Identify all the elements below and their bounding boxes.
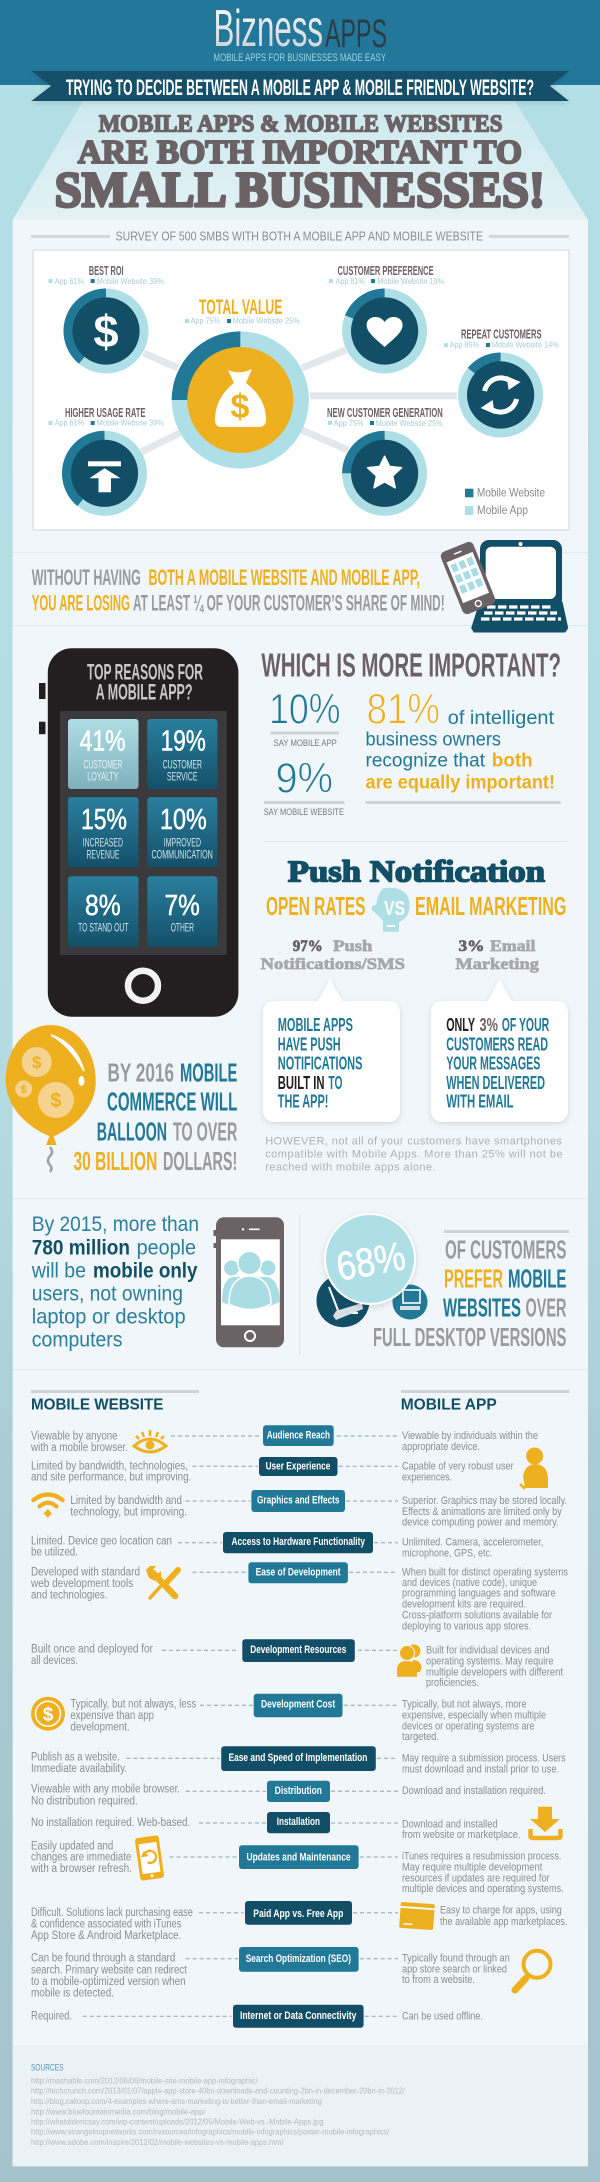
row: user experience xyxy=(31,1448,548,1488)
row: user experience: experiences. xyxy=(402,1472,452,1484)
chart: total value: App 75% xyxy=(191,317,220,326)
tile: 19% customer service: SERVICE xyxy=(167,769,198,783)
row: distribution: Download and installation required. xyxy=(402,1785,546,1797)
text: 780 million mobile only: laptop or desktop xyxy=(32,1305,186,1328)
callout: balloon to 30 billion: COMMERCE WILL xyxy=(107,1087,237,1117)
icon: magnifier xyxy=(515,1951,550,1990)
chart: customer preference: Mobile Website 19% xyxy=(377,277,444,286)
row: development resources: Development Resources xyxy=(250,1644,346,1656)
stat: 10% say mobile app xyxy=(269,685,341,748)
row: graphics and effects: technology, but improving. xyxy=(70,1506,187,1518)
survey heading: SURVEY OF 500 SMBS WITH BOTH A MOBILE APP AND MOBILE WEBSITE xyxy=(116,230,483,244)
icon: wifi xyxy=(34,1494,62,1518)
row: updates and maintenance: resources if updates are required for xyxy=(402,1872,550,1884)
tile: 8% to stand out xyxy=(68,876,138,947)
icon: phone with people xyxy=(214,1217,284,1347)
row: development cost: expensive, especially when multiple xyxy=(402,1710,546,1722)
callout: balloon to 30 billion: BY 2016 xyxy=(108,1058,174,1088)
sources panel background xyxy=(13,2045,588,2166)
icon: balloon xyxy=(6,1025,96,1172)
row: distribution: Distribution xyxy=(275,1785,322,1797)
label: 3% email marketing: Marketing xyxy=(455,956,539,973)
row: development resources: proficiencies. xyxy=(426,1677,479,1689)
tile: 10% improved communication: 10% xyxy=(160,804,207,836)
row: internet or data connectivity: Required. xyxy=(31,2010,72,2022)
tile: 10% improved communication xyxy=(147,797,217,867)
big phone: top reasons: A MOBILE APP? xyxy=(96,679,192,704)
speech bubble: mobile apps: TO xyxy=(328,1073,342,1093)
header band xyxy=(0,0,600,85)
row: updates and maintenance: Easily updated and xyxy=(31,1840,113,1852)
row: ease of development: deploying to various app stores. xyxy=(402,1620,531,1632)
speech bubble: only 3%: WITH EMAIL xyxy=(446,1092,514,1112)
row: updates and maintenance xyxy=(30,1835,564,1895)
label: 3% email marketing: 3% xyxy=(458,938,484,955)
tile: 41% customer loyalty: LOYALTY xyxy=(87,769,119,783)
row: development cost: development. xyxy=(70,1722,130,1734)
row: updates and maintenance: iTunes requires a resubmission process. xyxy=(402,1851,561,1863)
row: development cost: expensive than app xyxy=(70,1710,154,1722)
callout: 68% prefer mobile websites: WEBSITES xyxy=(443,1293,521,1323)
tile: 10% improved communication: COMMUNICATION xyxy=(152,848,213,862)
icon: developers xyxy=(397,1644,422,1677)
text: 780 million mobile only: By 2015, more than xyxy=(32,1213,199,1236)
row: development cost: Typically, but not always, less xyxy=(70,1698,197,1710)
callout: 68% prefer mobile websites: OVER xyxy=(526,1293,567,1323)
chart: best roi: Mobile Website 39% xyxy=(97,277,164,286)
row: paid app vs free app: & confidence associated with iTunes xyxy=(31,1918,182,1930)
row: search optimization: to a mobile-optimized version when xyxy=(31,1976,186,1988)
row: access to hardware functionality: Limited. Device geo location can xyxy=(31,1535,172,1547)
tile: 41% customer loyalty: 41% xyxy=(80,726,126,758)
stat: 81% both equally important: of intelligent xyxy=(448,708,555,729)
row: user experience: Limited by bandwidth, technologies, xyxy=(31,1460,188,1472)
icon: person xyxy=(520,1448,548,1488)
row: paid app vs free app: Easy to charge for apps, using xyxy=(440,1904,562,1916)
row: installation: Download and installed xyxy=(402,1818,498,1830)
stat: 10% say mobile app: 10% xyxy=(269,685,341,733)
stat: 10% say mobile app: SAY MOBILE APP xyxy=(274,738,337,748)
stat: 81% both equally important: recognize that xyxy=(366,751,486,772)
chart: best roi: App 61% xyxy=(55,277,84,286)
tile: 41% customer loyalty xyxy=(68,719,138,789)
row: development cost xyxy=(31,1694,546,1743)
tile: 7% other xyxy=(147,876,217,947)
sources: http://www.strangeloopnetworks.com/resources/infographics/mobile-infographics/poster-mobile-infographics/ xyxy=(31,2128,390,2137)
icon: 68% circle with computers: 68% xyxy=(333,1234,409,1290)
speech bubble: mobile apps: NOTIFICATIONS xyxy=(278,1054,362,1074)
sources xyxy=(31,2062,406,2147)
big phone: top reasons: TOP REASONS FOR xyxy=(87,659,203,684)
label: 97% push notifications: Push xyxy=(333,938,373,955)
row: ease and speed of implementation: May require a submission process. Users xyxy=(402,1753,566,1765)
row: access to hardware functionality xyxy=(31,1532,543,1560)
chart: customer preference: App 81% xyxy=(336,277,365,286)
stat: 81% both equally important xyxy=(366,685,561,804)
row: paid app vs free app: Difficult. Solutions lack purchasing ease xyxy=(31,1907,193,1919)
text: 780 million mobile only: will be xyxy=(31,1259,86,1282)
icon: money bag: $ xyxy=(231,388,250,426)
icon: laptop xyxy=(472,540,568,632)
row: access to hardware functionality: microphone, GPS, etc. xyxy=(402,1548,492,1560)
row: search optimization xyxy=(31,1947,550,2000)
row: audience reach: appropriate device. xyxy=(402,1441,480,1453)
row: ease of development: and technologies. xyxy=(31,1589,108,1601)
stat: 81% both equally important: 81% xyxy=(367,685,440,733)
callout: share of mind xyxy=(32,565,445,616)
row: audience reach: with a mobile browser. xyxy=(30,1442,128,1454)
row: development resources xyxy=(31,1639,563,1689)
stat: 81% both equally important: both xyxy=(492,751,533,772)
sources: http://techcrunch.com/2013/01/07/apple-app-store-40bn-downloads-and-counting-2bn-in-december-20bn-in-2012/ xyxy=(31,2087,406,2096)
row: ease and speed of implementation: Publish as a website. xyxy=(31,1751,120,1763)
heading: mobile app xyxy=(401,1390,570,1413)
icon: balloon: $ xyxy=(21,1084,27,1096)
stat: 81% both equally important: are equally important! xyxy=(366,772,555,793)
callout: balloon to 30 billion: MOBILE xyxy=(180,1058,237,1088)
callout: balloon to 30 billion: 30 BILLION xyxy=(74,1146,157,1176)
tile: 7% other: OTHER xyxy=(171,921,194,935)
row: graphics and effects: Superior. Graphics may be stored locally. xyxy=(402,1495,567,1507)
heading: push notification: Push Notification xyxy=(288,854,545,889)
chart legend xyxy=(465,486,545,517)
label: 97% push notifications: Notifications/SMS xyxy=(261,956,405,973)
callout: balloon to 30 billion: DOLLARS! xyxy=(163,1146,237,1176)
speech bubble: mobile apps: HAVE PUSH xyxy=(278,1034,341,1054)
row: audience reach: Viewable by individuals within the xyxy=(402,1430,538,1442)
row: audience reach: Viewable by anyone xyxy=(31,1431,118,1443)
row: search optimization: Can be found through a standard xyxy=(31,1953,175,1965)
row: ease of development xyxy=(30,1562,568,1632)
icon: boxing glove: VS xyxy=(384,898,405,920)
icon: 68% circle with computers xyxy=(316,1214,428,1327)
title: SMALL BUSINESSES! xyxy=(55,161,545,217)
speech bubble: only 3% xyxy=(431,979,568,1122)
note: however: reached with mobile apps alone. xyxy=(265,1162,436,1174)
heading: open rates vs email marketing: OPEN RATES xyxy=(266,891,366,921)
chart: higher usage rate: HIGHER USAGE RATE xyxy=(65,405,146,420)
speech bubble: mobile apps: BUILT IN xyxy=(278,1073,324,1093)
tile: 10% improved communication: IMPROVED xyxy=(164,836,201,850)
row: updates and maintenance: May require multiple development xyxy=(402,1861,542,1873)
tile: 15% increased revenue: INCREASED xyxy=(83,836,123,850)
row: development cost: devices or operating systems are xyxy=(402,1720,535,1732)
logo: Bizness xyxy=(214,0,323,58)
icon: coin: $ xyxy=(43,1704,54,1726)
label: 3% email marketing: Email xyxy=(490,938,536,955)
row: development resources: Built for individual devices and xyxy=(426,1645,550,1657)
heading: open rates vs email marketing xyxy=(266,888,566,932)
row: updates and maintenance: with a browser refresh. xyxy=(30,1863,132,1875)
chart: new customer generation xyxy=(327,405,443,516)
callout: 68% prefer mobile websites xyxy=(373,1230,569,1352)
note: however: HOWEVER, not all of your customers have smartphones xyxy=(265,1135,562,1147)
icon: coin xyxy=(31,1697,65,1731)
row: ease of development: and devices (native code), unique xyxy=(402,1577,537,1589)
chart: best roi: BEST ROI xyxy=(89,263,124,278)
chart: repeat customers xyxy=(444,327,559,438)
chart: repeat customers: App 86% xyxy=(450,341,479,350)
row: distribution: Viewable with any mobile browser. xyxy=(31,1784,180,1796)
row: ease and speed of implementation: Immediate availability. xyxy=(31,1763,127,1775)
chart: new customer generation: NEW CUSTOMER GENERATION xyxy=(327,405,443,420)
row: access to hardware functionality: be utilized. xyxy=(31,1547,78,1559)
tile: 19% customer service xyxy=(147,719,217,789)
speech bubble: mobile apps: MOBILE APPS xyxy=(278,1015,353,1035)
row: paid app vs free app: Paid App vs. Free App xyxy=(253,1908,344,1920)
sources: http://www.bluefountainmedia.com/blog/mobile-app/ xyxy=(31,2107,206,2116)
heading: mobile website xyxy=(31,1390,199,1413)
tile: 15% increased revenue xyxy=(68,797,138,867)
row: ease and speed of implementation: Ease and Speed of Implementation xyxy=(228,1752,368,1764)
tile: 8% to stand out: 8% xyxy=(85,890,121,922)
row: paid app vs free app: App Store & Android Marketplace. xyxy=(31,1930,181,1942)
chart: best roi: $ xyxy=(93,306,119,357)
chart: higher usage rate xyxy=(48,405,164,516)
icon: balloon: $ xyxy=(32,1053,42,1072)
chart: total value: TOTAL VALUE xyxy=(199,296,282,319)
speech bubble: only 3%: 3% xyxy=(480,1015,498,1035)
label: 97% push notifications: 97% xyxy=(293,938,323,955)
icon: download xyxy=(530,1807,560,1838)
tile: 15% increased revenue: 15% xyxy=(81,804,127,836)
row: ease of development: web development tools xyxy=(30,1578,133,1590)
row: search optimization: to from a website. xyxy=(402,1974,475,1986)
row: user experience: and site performance, but improving. xyxy=(31,1472,191,1484)
row: distribution xyxy=(31,1781,546,1807)
sources: http://blog.calloop.com/4-examples-where-sms-marketing-is-better-than-email-marketing xyxy=(31,2097,322,2106)
text: 780 million mobile only: mobile only xyxy=(93,1259,198,1282)
speech bubble: mobile apps xyxy=(263,979,400,1122)
icon: phone refresh xyxy=(135,1835,164,1881)
icon: boxing glove xyxy=(372,888,410,932)
row: ease of development: Developed with standard xyxy=(31,1567,140,1579)
row: development resources: Built once and deployed for xyxy=(31,1643,153,1655)
row: internet or data connectivity xyxy=(31,2005,483,2028)
title xyxy=(55,112,545,217)
heading: mobile website: MOBILE WEBSITE xyxy=(31,1396,164,1413)
row: ease and speed of implementation xyxy=(31,1746,566,1775)
callout: share of mind: YOU ARE LOSING xyxy=(32,591,130,616)
row: updates and maintenance: changes are immediate xyxy=(31,1852,131,1864)
row: installation xyxy=(31,1807,560,1841)
row: user experience: User Experience xyxy=(266,1460,330,1472)
row: installation: No installation required. Web-based. xyxy=(31,1817,190,1829)
stat: 9% say mobile website: 9% xyxy=(276,755,333,803)
title: ARE BOTH IMPORTANT TO xyxy=(78,134,522,171)
row: ease of development: Cross-platform solutions available for xyxy=(402,1609,552,1621)
speech bubble: only 3%: ONLY xyxy=(446,1015,475,1035)
callout: balloon to 30 billion xyxy=(74,1058,237,1176)
row: internet or data connectivity: Internet or Data Connectivity xyxy=(240,2010,357,2022)
tile: 19% customer service: CUSTOMER xyxy=(163,757,202,771)
chart: customer preference: CUSTOMER PREFERENCE xyxy=(338,263,434,278)
sources: SOURCES xyxy=(31,2062,64,2072)
row: development resources: all devices. xyxy=(31,1655,78,1667)
text: 780 million mobile only: people xyxy=(137,1236,196,1259)
trapezoid behind heading xyxy=(13,101,588,220)
row: development resources: multiple developers with different xyxy=(426,1666,563,1678)
chart: total value xyxy=(172,296,309,469)
sources: http://mashable.com/2012/06/06/mobile-site-mobile-app-infographic/ xyxy=(31,2076,258,2085)
stat: 81% both equally important: business owners xyxy=(366,729,501,750)
row: installation: Installation xyxy=(277,1816,320,1828)
icon: money bag xyxy=(215,369,266,427)
row: graphics and effects: device computing power and memory. xyxy=(402,1517,559,1529)
tile: 15% increased revenue: REVENUE xyxy=(86,848,119,862)
sources: http://www.adobe.com/inspire/2012/02/mobile-websites-vs-mobile-apps.html xyxy=(31,2138,283,2147)
row: paid app vs free app xyxy=(31,1901,568,1942)
row: development resources: operating systems. May require xyxy=(426,1656,553,1668)
row: access to hardware functionality: Unlimited. Camera, accelerometer, xyxy=(402,1537,543,1549)
text: 780 million mobile only: users, not owning xyxy=(32,1283,183,1306)
row: ease of development: Ease of Development xyxy=(256,1567,341,1579)
row: paid app vs free app: the available app marketplaces. xyxy=(440,1916,568,1928)
chart legend: Mobile Website xyxy=(477,486,545,500)
speech bubble: only 3%: OF YOUR xyxy=(502,1015,549,1035)
row: audience reach: Audience Reach xyxy=(267,1429,330,1441)
row: updates and maintenance: multiple devices and operating systems. xyxy=(402,1883,564,1895)
row: development cost: Typically, but not always, more xyxy=(402,1699,527,1711)
row: development cost: Development Cost xyxy=(261,1699,335,1711)
row: access to hardware functionality: Access to Hardware Functionality xyxy=(232,1536,366,1548)
row: ease and speed of implementation: must download and install prior to use. xyxy=(402,1763,559,1775)
row: user experience: Capable of very robust user xyxy=(402,1461,514,1473)
panel: survey chart xyxy=(33,250,569,530)
tile: 7% other: 7% xyxy=(165,890,200,922)
row: internet or data connectivity: Can be used offline. xyxy=(402,2010,483,2022)
logo: MOBILE APPS FOR BUSINESSES MADE EASY xyxy=(214,52,386,64)
label: 3% email marketing xyxy=(455,938,539,973)
row: search optimization: app store search or linked xyxy=(402,1963,507,1975)
row: search optimization: mobile is detected. xyxy=(31,1988,114,2000)
text: 780 million mobile only: 780 million xyxy=(32,1236,130,1259)
callout: balloon to 30 billion: BALLOON xyxy=(97,1116,167,1146)
chart: higher usage rate: Mobile Website 39% xyxy=(97,419,164,428)
icon: tilted phone xyxy=(439,540,497,616)
title: MOBILE APPS & MOBILE WEBSITES xyxy=(99,112,502,138)
text: 780 million mobile only: computers xyxy=(32,1329,122,1352)
sources: http://whatdidericsay.com/wp-content/uploads/2012/05/Mobile-Web-vs.-Mobile-Apps.jpg xyxy=(31,2117,323,2126)
row: graphics and effects xyxy=(34,1490,567,1529)
chart: new customer generation: Mobile Website 25% xyxy=(376,419,443,428)
row: search optimization: Typically found through an xyxy=(402,1953,510,1965)
callout: balloon to 30 billion: TO OVER xyxy=(173,1116,237,1146)
row: ease of development: programming languages and software xyxy=(402,1588,556,1600)
row: graphics and effects: Limited by bandwidth and xyxy=(70,1495,182,1507)
stat: 9% say mobile website xyxy=(264,755,344,817)
callout: share of mind: WITHOUT HAVING xyxy=(32,565,141,590)
text: 780 million mobile only xyxy=(31,1213,199,1352)
note: however xyxy=(265,1135,563,1174)
icon: tools xyxy=(146,1566,178,1598)
chart: total value: Mobile Website 25% xyxy=(233,317,300,326)
chart: customer preference xyxy=(329,263,444,374)
icon: balloon: $ xyxy=(50,1090,61,1112)
row: development cost: targeted. xyxy=(402,1731,439,1743)
row: audience reach xyxy=(30,1425,538,1454)
row: search optimization: Search Optimization (SEO) xyxy=(246,1953,351,1965)
label: 97% push notifications xyxy=(261,938,405,973)
row: ease of development: development kits are required. xyxy=(402,1599,526,1611)
row: search optimization: search. Primary website can redirect xyxy=(31,1964,187,1976)
speech bubble: mobile apps: THE APP! xyxy=(278,1092,328,1112)
row: distribution: No distribution required. xyxy=(31,1795,138,1807)
callout: 68% prefer mobile websites: PREFER xyxy=(444,1263,503,1293)
row: installation: from website or marketplace. xyxy=(402,1829,520,1841)
logo: APPS xyxy=(325,12,387,56)
chart: best roi xyxy=(48,263,164,374)
big phone: top reasons xyxy=(39,648,238,1017)
tile: 8% to stand out: TO STAND OUT xyxy=(78,921,129,935)
icon: credit card xyxy=(399,1902,435,1930)
tile: 41% customer loyalty: CUSTOMER xyxy=(83,757,123,771)
row: graphics and effects: Graphics and Effects xyxy=(257,1494,340,1506)
tile: 19% customer service: 19% xyxy=(161,726,206,758)
row: ease of development: When built for distinct operating systems xyxy=(402,1566,568,1578)
stat: 9% say mobile website: SAY MOBILE WEBSITE xyxy=(264,807,344,817)
row: updates and maintenance: Updates and Maintenance xyxy=(246,1851,351,1863)
heading: mobile app: MOBILE APP xyxy=(401,1396,497,1413)
chart: repeat customers: Mobile Website 14% xyxy=(492,341,559,350)
chart: repeat customers: REPEAT CUSTOMERS xyxy=(461,327,542,342)
chart: higher usage rate: App 61% xyxy=(55,419,84,428)
icon: eye xyxy=(134,1430,166,1452)
chart: new customer generation: App 75% xyxy=(334,419,364,428)
chart legend: Mobile App xyxy=(477,503,528,517)
note: however: compatible with Mobile Apps. More than 25% will not be xyxy=(265,1149,563,1161)
row: graphics and effects: Effects & animations are limited only by xyxy=(402,1506,562,1518)
